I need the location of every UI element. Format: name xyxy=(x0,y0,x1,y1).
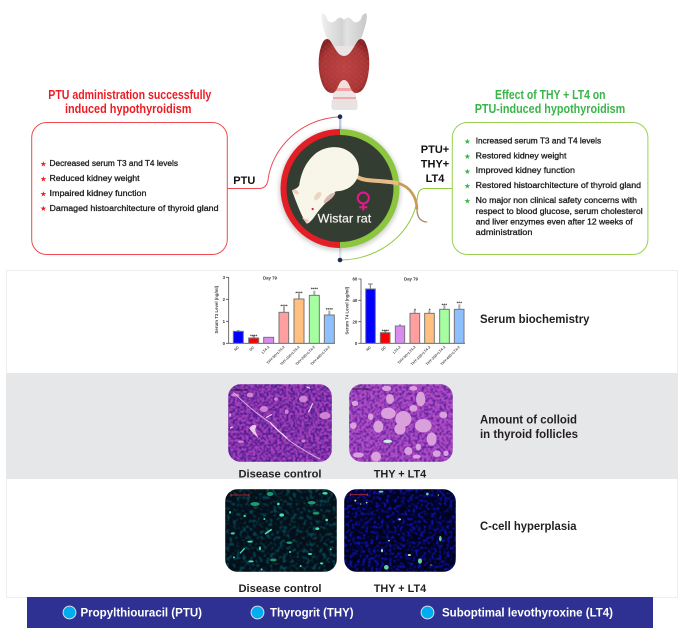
list: THY + LT4 findings: Restored kidney weight xyxy=(476,150,567,160)
label: PTU + THY + LT4 arm: PTU+ xyxy=(421,144,449,156)
icon: thyroid gland xyxy=(319,13,369,110)
caption: THY + LT4 H&E: THY + LT4 xyxy=(374,468,427,480)
x labels: T4: DC xyxy=(380,345,387,352)
list: PTU findings: ★ xyxy=(40,160,47,168)
x labels: T3: LT4-2 xyxy=(261,345,270,355)
significance marks: T3: **** xyxy=(250,334,257,339)
list: THY + LT4 findings: and liver enzymes even after 12 weeks of xyxy=(476,217,633,227)
label: PTU arm: PTU xyxy=(233,175,255,187)
list: PTU findings: Reduced kidney weight xyxy=(50,173,140,183)
significance marks: T4: * xyxy=(414,307,416,312)
panel: THY + LT4 effects xyxy=(452,122,648,254)
ticks: T3: 3 xyxy=(223,275,226,280)
significance marks: T4: *** xyxy=(457,301,462,306)
caption: disease control fluorescence: Disease control xyxy=(238,583,322,595)
x labels: T3: THY-400+LT4-2 xyxy=(310,345,331,366)
axis label: T4: Serum T4 Level (ng/ml) xyxy=(345,286,350,334)
chart: serum T4 xyxy=(345,277,465,366)
list: THY + LT4 findings: ★ xyxy=(464,152,471,161)
axes: T4 xyxy=(358,279,465,343)
label: amount of colloid: in thyroid follicles xyxy=(480,429,578,441)
axis label: T3: Serum T3 Level (ng/ml) xyxy=(214,285,219,333)
list: PTU findings: Decreased serum T3 and T4 levels xyxy=(50,158,178,168)
x labels: T3: THY-50+LT4-2 xyxy=(266,345,286,365)
legend item: PTU: Propylthiouracil (PTU) xyxy=(80,608,202,620)
x labels: T3: DC xyxy=(249,345,256,352)
significance marks: T4: * xyxy=(429,307,431,312)
label: PTU + THY + LT4 arm: LT4 xyxy=(426,173,445,185)
significance marks: T4: **** xyxy=(382,328,389,333)
connector: green curve to THY box xyxy=(340,188,452,260)
significance marks: T3 xyxy=(250,287,333,339)
label: serum biochemistry: Serum biochemistry xyxy=(480,314,590,326)
connector dot: bottom xyxy=(338,258,342,262)
scale bar: THY + LT4 fluorescence xyxy=(350,493,367,496)
significance marks: T4 xyxy=(382,301,462,333)
bars: T3 xyxy=(233,291,334,343)
list: THY + LT4 findings: administration xyxy=(476,227,533,237)
list: THY + LT4 findings: ★ xyxy=(464,197,471,206)
list: THY + LT4 findings: respect to blood glucose, serum cholesterol xyxy=(476,206,643,216)
list: THY + LT4 findings: ★ xyxy=(464,182,471,191)
ticks: T4: 40 xyxy=(353,298,358,303)
heading: THY + LT4 effect xyxy=(475,88,625,116)
list: PTU findings: ★ xyxy=(40,204,47,213)
list: THY + LT4 findings xyxy=(464,136,643,237)
x labels: T4 xyxy=(365,345,461,366)
heading: THY + LT4 effect: Effect of THY + LT4 on xyxy=(495,88,606,102)
panel: gray colloid band xyxy=(6,373,678,479)
axes: T3 xyxy=(226,277,335,343)
ticks: T3: 1 xyxy=(223,319,226,324)
fluorescence image: THY + LT4 xyxy=(344,489,456,572)
list: THY + LT4 findings: No major non clinical safety concerns with xyxy=(476,195,637,205)
list: PTU findings: ★ xyxy=(40,189,47,198)
connector dot: top xyxy=(338,114,342,119)
ticks: T3: 0 xyxy=(223,341,226,346)
x labels: T4: LT4-2 xyxy=(392,345,402,355)
panel: results frame xyxy=(6,270,678,598)
heading: PTU result xyxy=(48,88,211,116)
x labels: T3: NC xyxy=(233,345,240,352)
heading: PTU result: PTU administration successfully xyxy=(48,88,211,102)
list: PTU findings: ★ xyxy=(40,174,47,183)
ticks: T3: 2 xyxy=(223,297,226,302)
list: THY + LT4 findings: Restored histoarchitecture of thyroid gland xyxy=(476,180,641,190)
icon: female symbol xyxy=(358,192,369,210)
ticks: T4 xyxy=(353,277,358,346)
list: THY + LT4 findings: ★ xyxy=(464,137,471,146)
histology image: THY + LT4 xyxy=(349,384,453,462)
bars: T4 xyxy=(366,284,464,343)
x labels: T4: THY-100+LT4-2 xyxy=(410,345,431,366)
significance marks: T3: **** xyxy=(295,290,303,295)
significance marks: T3: **** xyxy=(326,307,333,312)
ticks: T4: 20 xyxy=(353,319,358,324)
x labels: T4: THY-50+LT4-2 xyxy=(397,345,417,365)
list: THY + LT4 findings: ★ xyxy=(464,167,471,176)
list: THY + LT4 findings: Increased serum T3 and T4 levels xyxy=(476,136,601,146)
fluorescence image: disease control xyxy=(225,489,337,572)
ticks: T3 xyxy=(223,275,226,346)
panel: PTU effects xyxy=(32,122,227,254)
x labels: T4: NC xyxy=(365,345,372,352)
label: amount of colloid xyxy=(480,414,578,441)
significance marks: T3: **** xyxy=(311,287,318,292)
x labels: T4: THY-400+LT4-2 xyxy=(440,345,461,366)
connector: vertical axis xyxy=(339,117,341,260)
label: Wistar rat: Wistar rat xyxy=(318,212,372,226)
x labels: T3 xyxy=(233,345,331,366)
label: PTU + THY + LT4 arm: THY+ xyxy=(421,158,449,170)
scale bar: disease control H&E xyxy=(231,390,248,391)
chart title: T3: Day 79 xyxy=(263,275,278,280)
ticks: T4: 0 xyxy=(355,341,358,346)
list: PTU findings: Impaired kidney function xyxy=(50,188,147,198)
significance marks: T4: *** xyxy=(442,302,447,307)
x labels: T4: THY-200+LT4-2 xyxy=(425,345,446,366)
label: PTU + THY + LT4 arm xyxy=(421,144,449,185)
heading: PTU result: induced hypothyroidism xyxy=(65,102,192,116)
significance marks: T3: **** xyxy=(280,304,288,309)
heading: THY + LT4 effect: PTU-induced hypothyroidism xyxy=(475,102,625,116)
list: PTU findings: Damaged histoarchitecture of thyroid gland xyxy=(50,203,219,213)
label: amount of colloid: Amount of colloid xyxy=(480,414,577,426)
x labels: T3: THY-100+LT4-2 xyxy=(279,345,301,366)
legend item: LT4: Suboptimal levothyroxine (LT4) xyxy=(442,608,613,620)
illustration: Wistar rat in ring xyxy=(279,129,427,251)
scale bar: disease control fluorescence xyxy=(231,494,249,496)
histology image: disease control xyxy=(228,384,332,462)
legend item: THY: Thyrogrit (THY) xyxy=(270,608,354,620)
connector: red curve to PTU box xyxy=(227,117,340,188)
ticks: T4: 60 xyxy=(353,277,358,282)
caption: THY + LT4 fluorescence: THY + LT4 xyxy=(374,583,427,595)
list: THY + LT4 findings: Improved kidney function xyxy=(476,165,575,175)
legend bar xyxy=(27,597,653,628)
label: C-cell hyperplasia: C-cell hyperplasia xyxy=(480,521,577,533)
caption: disease control H&E: Disease control xyxy=(238,468,322,480)
chart title: T4: Day 79 xyxy=(404,277,419,282)
scale bar: THY + LT4 H&E xyxy=(352,388,368,390)
x labels: T3: THY-200+LT4-2 xyxy=(295,345,316,366)
chart: serum T3 xyxy=(214,275,335,366)
list: PTU findings xyxy=(40,158,219,213)
